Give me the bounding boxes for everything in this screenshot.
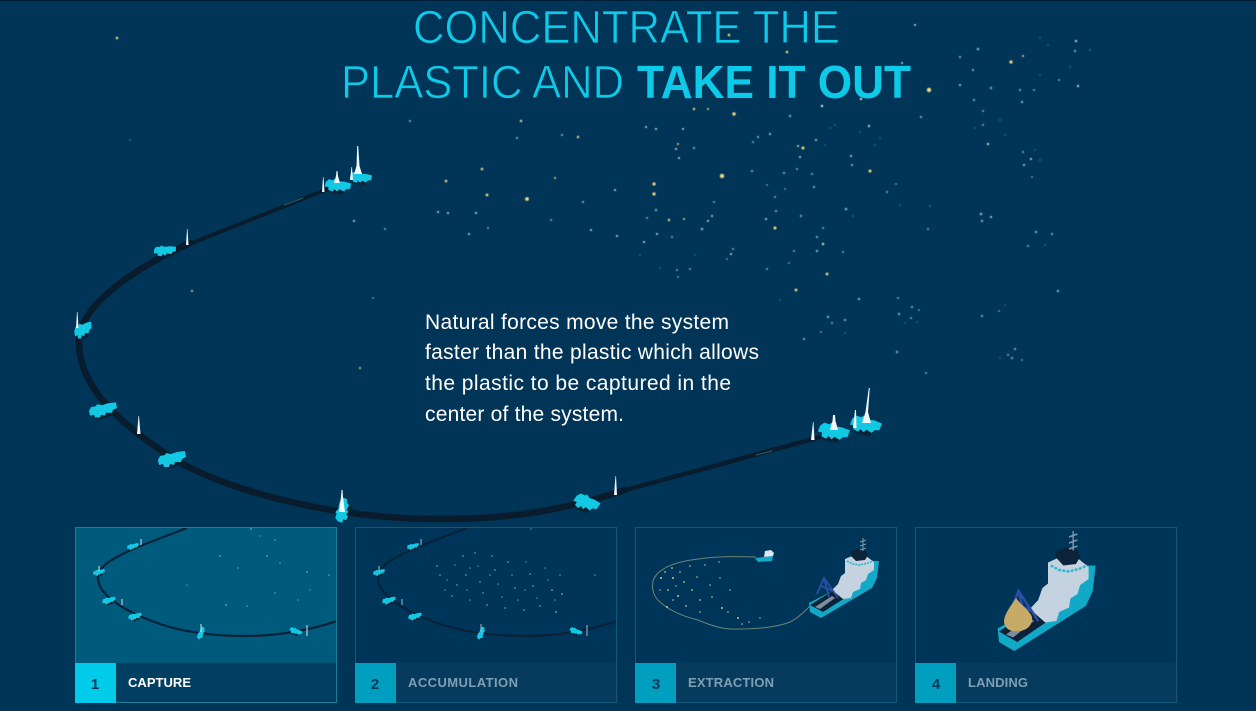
panel: landing (915, 528, 1176, 703)
landing label (915, 663, 1176, 703)
extraction thumbnail (652, 538, 879, 629)
description text: faster than the plastic which allows (425, 341, 759, 364)
icon: tug boat (755, 550, 774, 562)
panel: capture (75, 528, 337, 703)
description text: center of the system. (425, 403, 624, 426)
title: PLASTIC AND (341, 56, 624, 108)
landing label: 4 (932, 676, 941, 693)
description text: the plastic to be captured in the (425, 372, 731, 395)
title: CONCENTRATE THE (413, 1, 840, 53)
capture label (75, 663, 336, 703)
plastic particles (116, 24, 1091, 374)
title (341, 1, 911, 108)
icon: extraction ship (809, 538, 879, 618)
icon: plastic sack (1004, 598, 1032, 631)
floaters and poles (74, 146, 883, 526)
panel: extraction (635, 528, 896, 703)
capture label: CAPTURE (128, 675, 191, 690)
extraction label: 3 (652, 676, 660, 693)
accumulation label: 2 (371, 676, 379, 693)
extraction label: EXTRACTION (688, 675, 774, 690)
capture thumbnail (93, 528, 337, 641)
title: TAKE IT OUT (637, 56, 911, 108)
panel: accumulation (355, 528, 617, 703)
accumulation thumbnail (373, 528, 617, 641)
accumulation label: ACCUMULATION (408, 675, 518, 690)
description text (425, 311, 759, 426)
accumulation label (355, 663, 616, 703)
description text: Natural forces move the system (425, 311, 729, 334)
extraction label (635, 663, 896, 703)
landing label: LANDING (968, 675, 1028, 690)
cleanup system barrier curve (79, 188, 835, 519)
icon: landing ship with sack (998, 531, 1096, 651)
capture label: 1 (91, 676, 99, 693)
